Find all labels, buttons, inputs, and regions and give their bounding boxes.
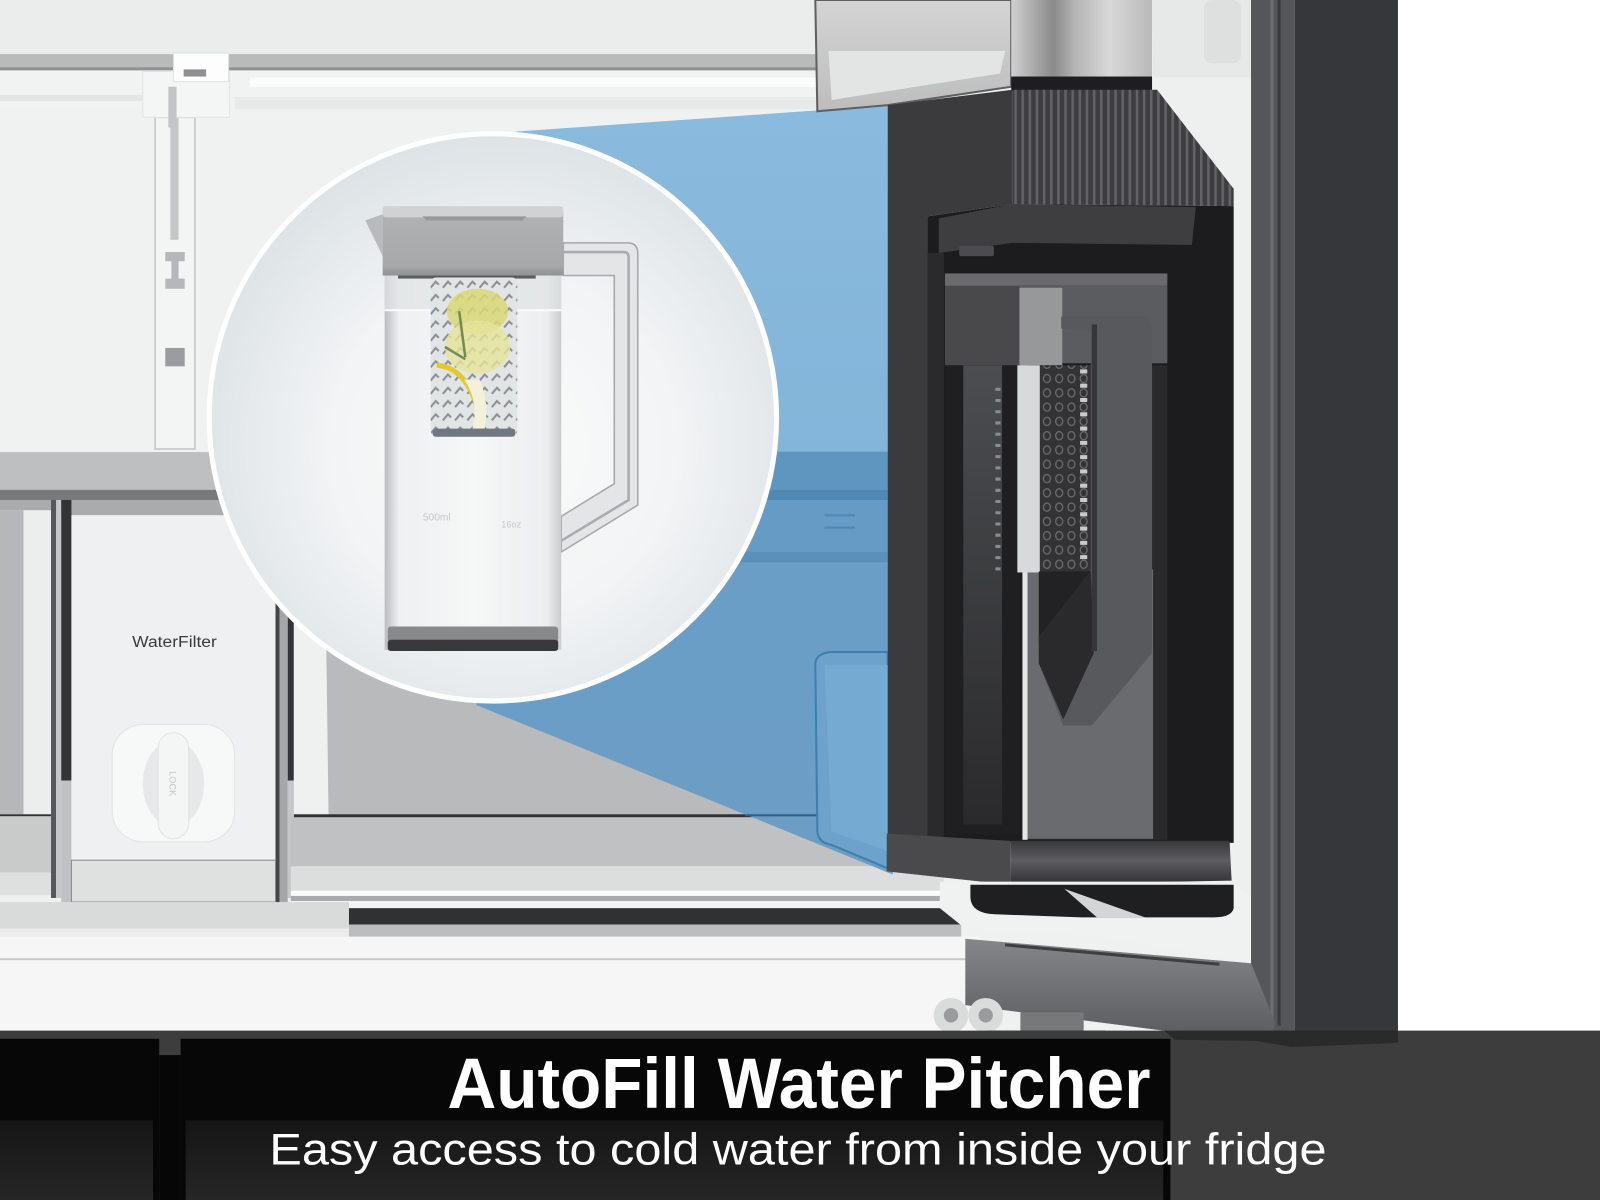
base ledge	[0, 902, 980, 1031]
filter lock knob: LOCK	[167, 771, 177, 797]
door white liner	[1152, 78, 1251, 898]
subtitle: Easy access to cold water from inside your fridge	[269, 1123, 1327, 1174]
black drawer fronts	[0, 1039, 1170, 1200]
infuser perforated cylinder	[1017, 365, 1091, 643]
left bin	[0, 500, 61, 898]
pitcher compartment housing	[888, 90, 1234, 847]
door outer panel	[1251, 0, 1398, 1043]
infuser with lemon and herbs	[431, 278, 517, 437]
compartment base	[887, 834, 1232, 885]
filter lock knob	[112, 724, 235, 842]
lower shelf shadow	[0, 490, 816, 515]
compartment opening	[928, 204, 1234, 843]
pitcher handle	[561, 243, 638, 552]
upper door bins	[815, 0, 1251, 189]
water filter label: WaterFilter	[132, 634, 217, 651]
top shelf rail	[0, 54, 816, 109]
door bottom overlay	[1164, 1031, 1398, 1047]
shelf bracket	[143, 53, 230, 449]
upper opening band	[939, 204, 1196, 253]
ribbed fascia	[1012, 90, 1234, 206]
pitcher handle	[1039, 316, 1152, 726]
lower door trim and gasket	[940, 882, 1274, 1033]
magnified pitcher circle	[209, 134, 777, 701]
door hinges	[934, 998, 1105, 1039]
blue glass in door bin	[815, 652, 888, 868]
right crisper bin	[291, 515, 944, 908]
fridge interior background	[0, 0, 1398, 1031]
pitcher lid	[365, 206, 563, 279]
blue projection beam	[477, 105, 893, 874]
pitcher body: 16oz	[501, 520, 522, 530]
lower shelf strip	[0, 452, 816, 490]
bottom caption band	[0, 1031, 1600, 1200]
water filter cartridge	[61, 500, 294, 903]
pitcher inside door	[945, 273, 1167, 840]
pitcher body	[385, 276, 561, 651]
title: AutoFill Water Pitcher	[447, 1044, 1151, 1124]
measuring marks: 500ml	[423, 512, 451, 523]
